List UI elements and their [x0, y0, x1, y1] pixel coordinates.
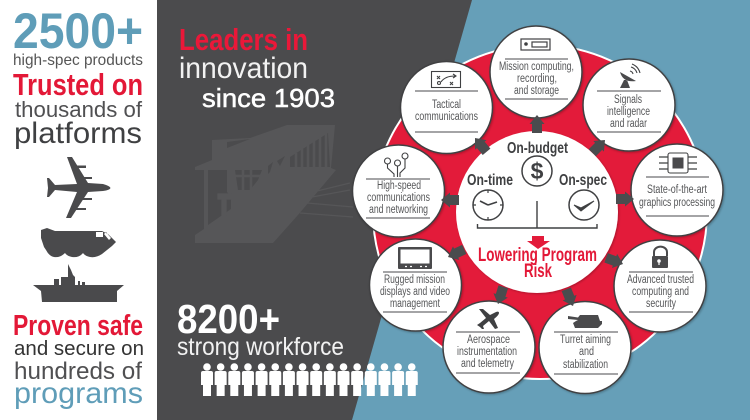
icon: chip [659, 153, 697, 173]
panel: left white column [0, 0, 157, 420]
label: On-time: On-time [467, 172, 513, 189]
text: graphics label: State-of-the-art [647, 184, 708, 196]
text: strong workforce: strong workforce [177, 333, 344, 361]
text: high-spec products: high-spec products [13, 52, 143, 69]
text: high-speed label: communications [367, 192, 430, 204]
text: trusted label: computing and [632, 286, 689, 298]
illustration: ghost biplane [195, 125, 353, 243]
panel: turret [539, 302, 631, 394]
icon: monitor [398, 247, 432, 269]
panel: blue background [157, 0, 750, 420]
text: rugged label: displays and video [380, 286, 450, 298]
text: aerospace label: and telemetry [461, 358, 514, 370]
text: since 1903: since 1903 [202, 83, 335, 113]
text: tactical label: communications [415, 111, 478, 123]
heading: Proven safe: Proven safe [13, 310, 143, 342]
panel: tactical communications [400, 62, 492, 154]
icon: jet [477, 309, 499, 329]
panel: rugged displays [370, 239, 462, 331]
text: high-speed label: High-speed [377, 180, 421, 192]
text: turret label: Turret aiming [560, 334, 611, 346]
text: programs: programs [14, 377, 143, 410]
icon: ship [33, 264, 124, 302]
arrows: centre to capabilities [441, 115, 634, 309]
bracket connector [478, 201, 597, 228]
text: turret label: and [579, 346, 594, 358]
text: signals label: intelligence [607, 106, 650, 118]
panel: graphics processing [631, 144, 723, 236]
icon: tactic board [432, 72, 460, 88]
text: turret label: stabilization [563, 359, 608, 371]
text: rugged label: management [390, 298, 441, 310]
icon: recorder [521, 39, 550, 50]
stat: 8200+: 8200+ [177, 296, 280, 342]
text: hundreds of: hundreds of [14, 358, 142, 385]
text: signals label: Signals [614, 94, 642, 106]
panel: trusted computing [614, 240, 706, 332]
arrow: red down [527, 236, 550, 249]
heading: Trusted on: Trusted on [13, 67, 143, 102]
text: platforms: platforms [14, 117, 142, 150]
text: trusted label: security [646, 298, 676, 310]
icon: padlock [652, 247, 668, 268]
icon: circuit [384, 153, 408, 177]
text: tactical label: Tactical [432, 99, 461, 111]
text: and secure on: and secure on [14, 338, 144, 360]
label: On-budget: On-budget [507, 140, 569, 157]
heading: Risk: Risk [524, 261, 552, 282]
panel: mission computing [490, 26, 582, 118]
icon: radar dish [620, 64, 640, 88]
text: mission label: Mission computing, [499, 61, 574, 73]
icon: dollar: $ [531, 158, 544, 184]
stat: 2500+: 2500+ [13, 3, 143, 59]
icon: aeroplane [47, 157, 110, 218]
heading: Lowering Program: Lowering Program [478, 245, 597, 266]
icon: tank [568, 315, 602, 328]
red ring [373, 45, 707, 379]
icon: row of people [201, 363, 418, 396]
icon: armoured vehicle [41, 228, 116, 257]
text: rugged label: Rugged mission [384, 274, 445, 286]
text: signals label: and radar [610, 118, 647, 130]
panel: aerospace [443, 301, 535, 393]
text: aerospace label: Aerospace [467, 334, 510, 346]
panel: high-speed communications [352, 145, 444, 237]
text: mission label: and storage [514, 85, 559, 97]
text: trusted label: Advanced trusted [627, 274, 694, 286]
icon: check [569, 190, 599, 220]
label: On-spec: On-spec [559, 172, 607, 189]
text: high-speed label: and networking [369, 204, 428, 216]
text: innovation: innovation [179, 52, 308, 85]
panel: signals intelligence [583, 59, 675, 151]
panel: centre circle [456, 131, 618, 293]
text: thousands of: thousands of [15, 97, 143, 122]
icon: clock [473, 190, 503, 220]
text: aerospace label: instrumentation [457, 346, 517, 358]
panel: dark centre [157, 0, 472, 420]
text: mission label: recording, [517, 73, 557, 85]
heading: Leaders in: Leaders in [179, 22, 308, 57]
icon: dollar [522, 156, 552, 186]
text: graphics label: graphics processing [639, 197, 715, 209]
